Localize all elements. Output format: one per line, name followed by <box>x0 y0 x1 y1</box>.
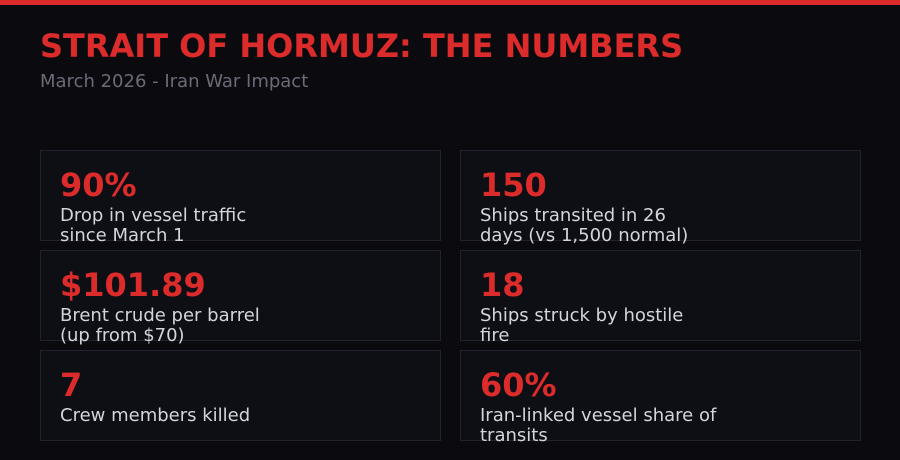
card: ships struck: 18 <box>480 266 525 304</box>
card: iran-linked share <box>460 350 861 441</box>
card: ships transited: 150 <box>480 166 547 204</box>
card: crew killed <box>40 350 441 441</box>
card: iran-linked share: Iran-linked vessel share of <box>480 405 716 426</box>
card: brent crude: (up from $70) <box>60 325 185 346</box>
card: brent crude: Brent crude per barrel <box>60 305 260 326</box>
card: iran-linked share: 60% <box>480 366 557 404</box>
card: brent crude <box>40 250 441 341</box>
title: STRAIT OF HORMUZ: THE NUMBERS <box>40 27 683 65</box>
subtitle: March 2026 - Iran War Impact <box>40 71 308 92</box>
card: vessel traffic drop: Drop in vessel traffic <box>60 205 246 226</box>
card: ships struck: Ships struck by hostile <box>480 305 683 326</box>
card: ships transited: Ships transited in 26 <box>480 205 666 226</box>
card: iran-linked share: transits <box>480 425 548 446</box>
card: ships struck <box>460 250 861 341</box>
card: ships transited <box>460 150 861 241</box>
card: ships struck: fire <box>480 325 509 346</box>
card: vessel traffic drop <box>40 150 441 241</box>
card: crew killed: 7 <box>60 366 82 404</box>
card: vessel traffic drop: 90% <box>60 166 137 204</box>
card: ships transited: days (vs 1,500 normal) <box>480 225 688 246</box>
card: vessel traffic drop: since March 1 <box>60 225 185 246</box>
card: brent crude: $101.89 <box>60 266 206 304</box>
card: crew killed: Crew members killed <box>60 405 250 426</box>
